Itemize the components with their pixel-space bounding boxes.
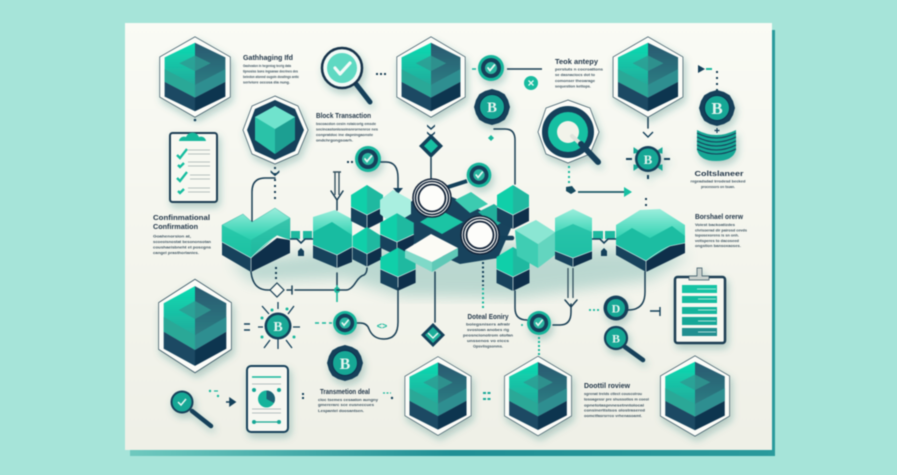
arrow: check to cube [347,162,403,194]
icon: close circle [524,76,538,90]
panel shadow [130,30,775,456]
connector: curve to code icon [357,288,398,339]
text block: block transaction: Block Transaction [316,111,371,120]
text block: confirmation: cangel prasthorlanies. [153,250,199,255]
text block: broadcast review [695,212,747,248]
icon: magnifier with check [322,48,370,102]
block: cube upper right [497,185,529,229]
text block: tech entropy [555,57,603,88]
soft network shadow [230,240,690,298]
icon: coin stack [697,130,736,161]
icon: bitcoin magnifier [605,327,643,360]
block: cube lower right [497,247,529,291]
colon dots [302,393,304,399]
teal facet right [478,204,512,226]
text block: detail entry [463,312,514,348]
icon: shield magnifier [538,100,599,163]
block: second [313,210,352,268]
icon: bitcoin sunburst left: B [273,320,283,335]
text block: detail review: consinerttstsos olostrasered [584,408,646,412]
icon: octagon cube [243,96,308,164]
icon: small magnifier [172,392,211,426]
icon: list clipboard [675,268,725,343]
icon: checklist clipboard [170,133,217,202]
text block: gathering: seriviore occosa dia nung. [243,80,290,84]
arrow: octagon to left block [247,167,279,228]
central blockchain network [222,179,690,298]
text block: block transaction [316,111,378,142]
text block: detail review: oomctfasrsrrco vrhenasoamt. [584,413,642,418]
icon: bitcoin magnifier: B [612,332,620,346]
text block: gathering: Gathhaging Ifd [243,53,293,62]
diamond junction with line [421,272,445,347]
text block: collateral: processors on tsuan. [701,184,735,189]
arrow: top right corner [698,65,717,92]
hexagon block: top right [613,37,683,117]
hexagon block: bottom centre [505,356,571,436]
icon: bitcoin badge top right: B [711,99,723,118]
lens 1 [413,179,467,217]
dashes between hexes [483,393,492,399]
text block: gathering: tipnosiss bons ingsanae decrines des [243,68,298,74]
dark plane behind lenses [392,188,512,264]
teal facets on plane [420,210,463,234]
text block: detail entry: Doteal Eoniry [468,312,508,321]
text block: tech entropy: Teok antepy [555,57,598,66]
connector: badge to right block [645,198,647,230]
arrow: magnifier to phone [209,390,235,406]
dashes: check lower [315,322,332,324]
hexagon block: bottom centre left [405,357,471,435]
icon: check badge lower right [527,311,551,335]
text block: broadcast review: chrisoerad dir pairosd cevds [695,228,747,232]
block: cube lower [353,227,381,267]
text block: tech entropy: perstuts n cocroattons [555,66,603,72]
icon: check badge on lens [467,163,491,187]
icon: bitcoin sunburst right: B [644,152,653,167]
text block: confirmation: Confirmation [153,222,198,231]
text block: confirmation: Goahenorsion at, [153,234,191,238]
dotted connector [482,262,484,308]
text block: collateral: regeadsdad trrodesd becked [690,178,746,184]
text block: transaction deal: Lespantel doosantsen. [318,408,364,413]
icon: bitcoin badge top centre [474,89,510,125]
block: hex right [555,209,592,267]
teal facet upper [455,192,488,213]
equals sign [244,324,250,330]
text block: detail entry: peosncionotrom otofan [463,332,514,338]
text block: transaction deal: gmererarc sce eusneccues [318,402,374,407]
arrow: shield to bottom right [566,166,632,197]
text block: block transaction: ondchrgongsoarh. [316,138,353,142]
connector: check to label [472,68,542,70]
main panel [125,23,772,450]
text block: transaction deal [318,387,379,413]
text block: collateral: Coltslaneer [694,169,744,178]
block: big left [222,208,290,272]
text block: transaction deal: cloc tsemes cesaaton aungny [318,397,379,402]
text block: block transaction: bscoacdon cesin rolaicorlg emsde [316,121,377,126]
text block: detail entry: Opsvlisgsonms. [473,344,503,348]
connector: curve to code icon: <> [377,321,387,331]
connector: left links [290,231,313,256]
connector: teal junction [334,268,367,302]
text block: tech entropy: comonser theoarage [555,78,596,83]
text block: confirmation: coushaeisbneht et poscgns [153,244,211,250]
text block: confirmation: Confinmational [153,213,210,222]
icon: bitcoin sunburst right [626,146,670,179]
arrow: top centre to lens with diamond [419,124,443,180]
block: big right [616,209,685,272]
block: cube bottom left [380,248,416,291]
connector dots [376,73,388,75]
icon: bitcoin badge top right [699,90,735,126]
text block: confirmation: scoeoisnostat besononsotan [153,239,212,244]
text block: gathering: beiedon atonnd ougoin dosdings antic [243,74,300,79]
text block: detail review: opnetotaspnnesetnntolocal [584,402,644,408]
text block: detail entry: unssenos vo eiccs [467,338,509,343]
arrow: top right hex to badge [643,118,653,137]
icon: bitcoin check circle: D [612,302,621,316]
connector: circle to right block [589,272,645,310]
light cube behind [380,190,411,225]
text block: collateral [690,169,746,189]
arrow: double line down [331,172,343,210]
dashed arrow to hex [383,393,393,399]
block: cube mid left [380,213,414,255]
text block: transaction deal: Transmetion deal [320,387,370,396]
connector: lower cube to check [515,268,577,326]
icon: check badge lower middle [333,311,357,335]
text block: broadcast review: Borshael orerw [695,212,743,221]
text block: block transaction: secincastonlosoinsnrornenrce nes [316,126,378,132]
block: light cube [515,220,555,268]
dotted connector to hex [538,337,540,355]
icon: mobile phone chart [247,366,288,432]
hexagon block: top centre [397,37,465,117]
connector dot [194,119,196,121]
connector tick [650,307,660,316]
hexagon block: bottom right [660,356,730,436]
text block: tech entropy: se dasnaciocs dot to [555,72,596,77]
white plate [405,234,458,272]
text block: broadcast review: veitsperes to dacoseed [695,238,740,243]
text block: broadcast review: Voiest backoatizdes [695,222,735,227]
icon: bitcoin badge lower middle [327,345,363,381]
icon: check badge top centre [478,55,504,81]
hexagon block: lower left [159,279,231,373]
text block: detail review: sgrenat trelds ctlect couscolrou [584,391,643,396]
text block: gathering: Gashealon in hegeniog tecrig data [243,63,292,68]
hexagon block: top left [160,37,230,117]
icon: bitcoin sunburst left [258,302,300,349]
text block: tech entropy: sequestion kettops. [555,84,591,88]
plus sign [714,128,720,133]
text block: detail review: tosoagessr pre shussotlos m coeol [584,396,649,402]
icon: bitcoin badge top centre: B [487,100,497,116]
text block: detail entry: bolegsnisers afratr [466,322,511,326]
text block: confirmation [153,213,212,255]
text block: block transaction: conpratdoc ine dapningaonste [316,132,374,137]
icon: bitcoin badge lower middle: B [340,356,351,373]
connector: badge curve [488,129,515,184]
text block: gathering [243,53,300,84]
text block: detail review [584,381,649,418]
connector: right links [592,231,616,256]
icon: check badge upper middle [355,146,381,172]
connector: left block bottom with diamond [251,267,337,297]
text block: broadcast review: ongstion bansoxaoses. [695,243,741,248]
text block: detail entry: svosioan anobes rig [467,327,510,332]
text block: detail review: Doottil roview [584,381,630,390]
lens 2 [461,216,512,254]
block: cube upper [351,185,383,229]
icon: bitcoin check circle [604,296,628,320]
text block: broadcast review: toposexorens is sn onh. [695,232,739,238]
